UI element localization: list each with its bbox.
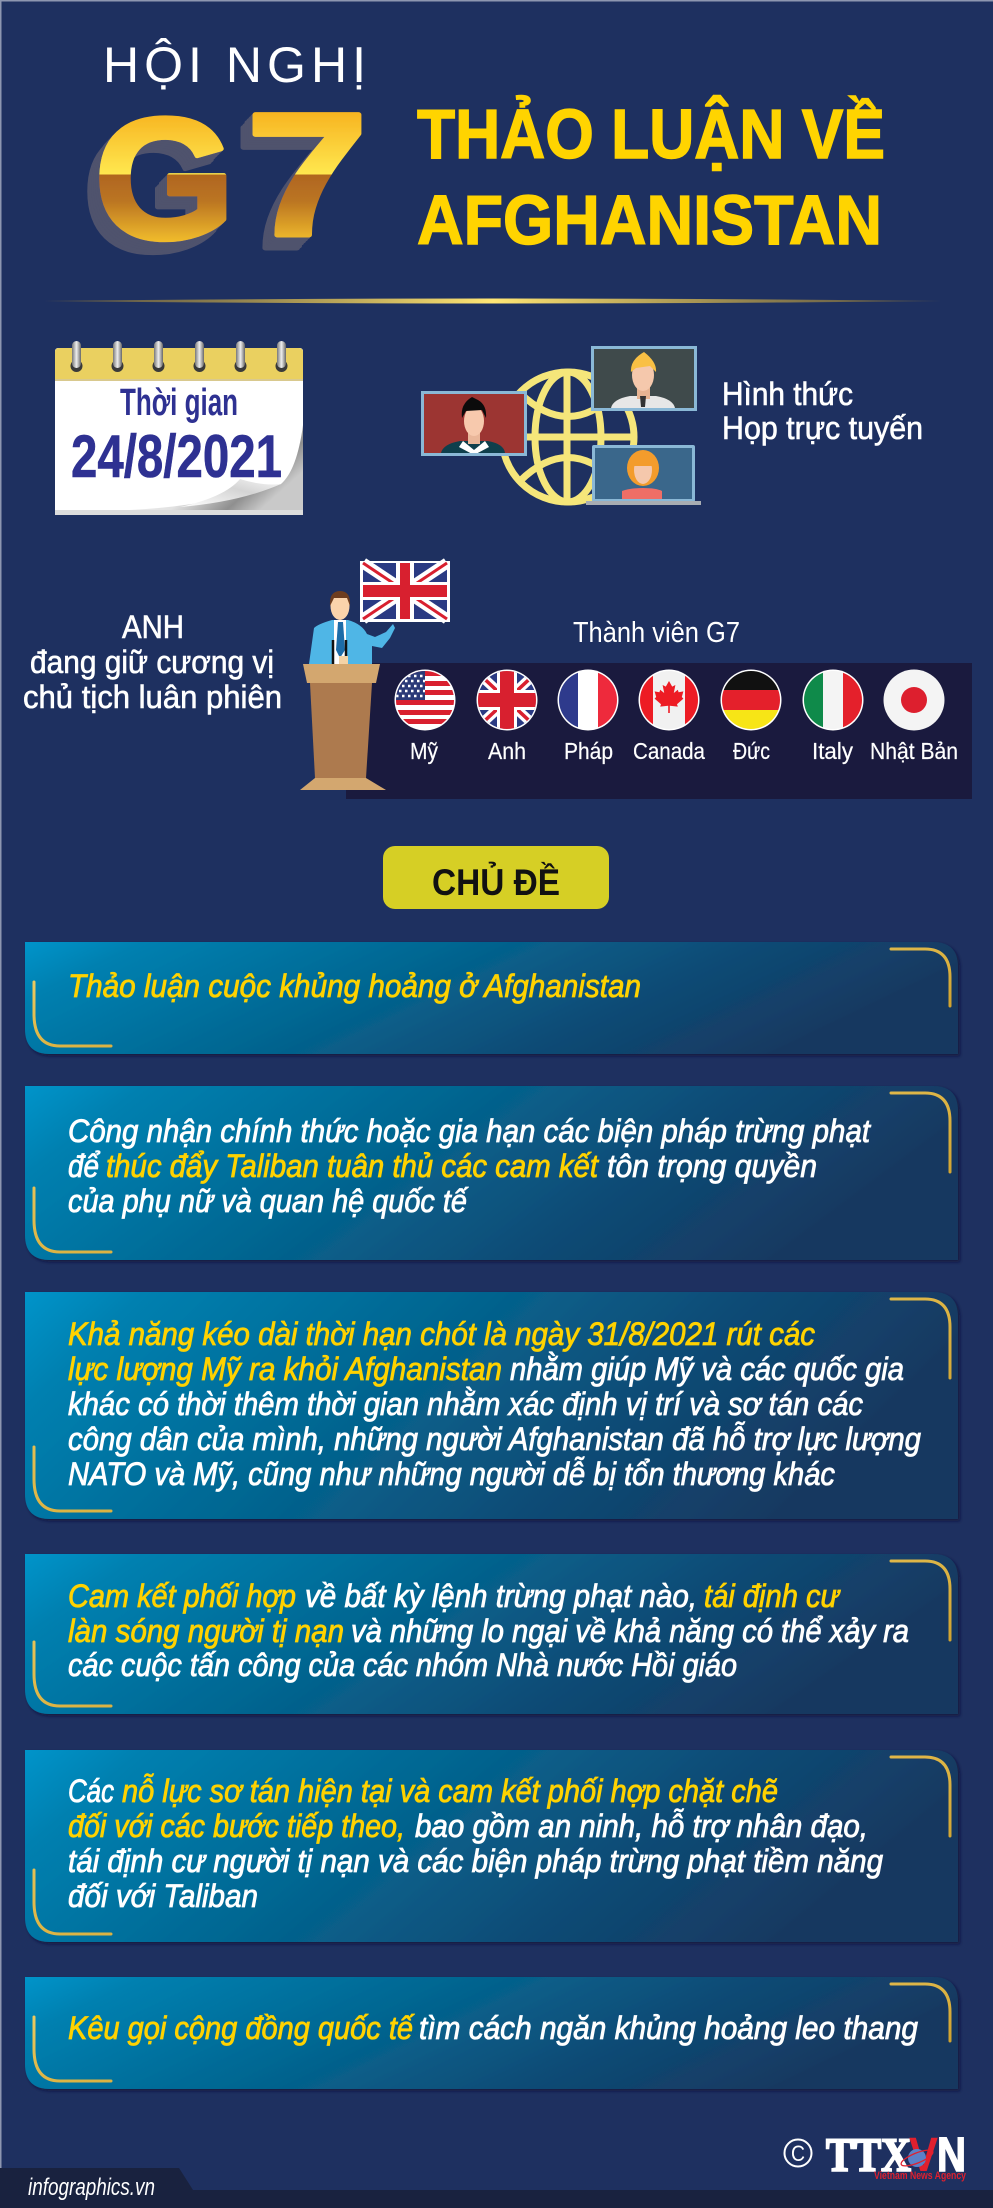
heading: Thảo luận về Afghanistan: THẢO LUẬN VỀ [417, 94, 885, 173]
flag: UK [476, 670, 538, 730]
text: Thảo luận cuộc khủng hoảng ở Afghanistan [68, 968, 641, 1004]
participant: blond man [591, 346, 697, 411]
text: để [68, 1148, 101, 1184]
text: nhằm giúp Mỹ và các quốc gia [510, 1351, 904, 1387]
footer: source: infographics.vn [28, 2174, 155, 2201]
text [68, 1773, 883, 1914]
flag: Germany [720, 670, 782, 730]
button: topic heading [383, 846, 609, 909]
panel: topic 2 [25, 1086, 958, 1260]
binder rings [70, 341, 288, 372]
flag: USA [394, 670, 456, 730]
text [68, 1316, 921, 1492]
text: bao gồm an ninh, hỗ trợ nhân đạo, [415, 1808, 868, 1844]
text: tìm cách ngăn khủng hoảng leo thang [419, 2010, 918, 2046]
panel: topic 4 [25, 1554, 958, 1714]
member labels [410, 738, 958, 764]
speaker figure [309, 591, 395, 665]
text: của phụ nữ và quan hệ quốc tế [68, 1183, 469, 1219]
flag: Italy [802, 670, 864, 730]
icon: speaker at podium with UK flag [300, 561, 450, 790]
text: UK rotating presidency: chủ tịch luân phiên [23, 679, 282, 715]
text: các cuộc tấn công của các nhóm Nhà nước Hồi giáo [68, 1647, 737, 1683]
logo: G7 gold lettering: 7 [246, 77, 368, 272]
panel: G7 members [346, 617, 972, 799]
agency globe [899, 2147, 935, 2169]
member labels: Đức [733, 738, 770, 764]
panel: topic 5 [25, 1750, 958, 1942]
title block [94, 37, 885, 275]
member labels: Mỹ [410, 738, 438, 764]
panel: topic 6 [25, 1977, 958, 2089]
text: NATO và Mỹ, cũng như những người dễ bị tổn thương khác [68, 1456, 835, 1492]
panel: topic 3 [25, 1292, 958, 1519]
logo: G7 gold lettering [94, 77, 368, 275]
footer: source [0, 2168, 993, 2208]
text [68, 2010, 918, 2046]
member labels: Canada [633, 738, 705, 764]
agency wordmark: TTX [826, 2129, 911, 2182]
text: format of meeting: Hình thức [722, 376, 853, 412]
member labels: Nhật Bản [870, 738, 958, 764]
heading: Thảo luận về Afghanistan: AFGHANISTAN [417, 181, 882, 259]
copyright mark: C [791, 2141, 805, 2166]
agency tagline: Vietnam News Agency [874, 2170, 967, 2182]
logo: TTXVN [784, 2129, 967, 2182]
text: tôn trọng quyền [607, 1148, 817, 1184]
text: format of meeting [722, 376, 923, 446]
participant: man on red screen [421, 391, 527, 456]
flag: Japan [884, 670, 944, 730]
text: công dân của mình, những người Afghanistan đã hỗ trợ lực lượng [68, 1421, 921, 1457]
text: về bất kỳ lệnh trừng phạt nào, [305, 1578, 697, 1614]
text: Các [68, 1773, 114, 1809]
text: Khả năng kéo dài thời hạn chót là ngày 31/8/2021 rút các [68, 1316, 815, 1352]
UK flag board [360, 561, 450, 622]
flag: Canada [638, 670, 700, 730]
agency wordmark: N [937, 2129, 966, 2182]
text [68, 1578, 909, 1683]
calendar: date [55, 341, 303, 515]
heading: Thảo luận về Afghanistan [417, 94, 885, 259]
flag: France [558, 670, 618, 730]
icon: globe with video participants [421, 346, 701, 505]
heading: G7 members: Thành viên G7 [573, 617, 740, 649]
member labels: Italy [812, 738, 853, 764]
text: đối với các bước tiếp theo, [68, 1808, 405, 1844]
page curl [130, 425, 303, 510]
button: topic heading: CHỦ ĐỀ [432, 861, 560, 903]
copyright mark [784, 2140, 812, 2166]
text: UK rotating presidency [23, 609, 282, 715]
text: Công nhận chính thức hoặc gia hạn các biện pháp trừng phạt [68, 1113, 871, 1149]
member labels: Anh [488, 738, 526, 764]
text: tái định cư người tị nạn và các biện pháp trừng phạt tiềm năng [68, 1843, 883, 1879]
text: nỗ lực sơ tán hiện tại và cam kết phối hợp chặt chẽ [122, 1773, 778, 1809]
logo: G7 gold lettering: G [95, 83, 235, 275]
text: thúc đẩy Taliban tuân thủ các cam kết [106, 1148, 599, 1184]
text: và những lo ngại về khả năng có thể xảy ra [351, 1613, 909, 1649]
text: UK rotating presidency: ANH [122, 609, 184, 645]
text: làn sóng người tị nạn [68, 1613, 344, 1649]
text: UK rotating presidency: đang giữ cương vị [30, 644, 274, 680]
podium [300, 664, 386, 790]
calendar date: 24/8/2021 [71, 423, 282, 490]
text [68, 1113, 871, 1219]
text: Cam kết phối hợp [68, 1578, 296, 1614]
agency wordmark: V [909, 2129, 938, 2182]
member labels: Pháp [564, 738, 613, 764]
text: format of meeting: Họp trực tuyến [722, 410, 923, 446]
heading: Hội nghị: HỘI NGHỊ [103, 37, 366, 93]
calendar label: Thời gian [120, 382, 238, 424]
participant: woman on laptop [586, 445, 701, 505]
globe [502, 372, 634, 502]
text: Kêu gọi cộng đồng quốc tế [68, 2010, 415, 2046]
panel: topic 1 [25, 942, 958, 1054]
text: tái định cư [704, 1578, 841, 1614]
text: khác có thời thêm thời gian nhằm xác định vị trí và sơ tán các [68, 1386, 863, 1422]
text: đối với Taliban [68, 1878, 258, 1914]
text: lực lượng Mỹ ra khỏi Afghanistan [68, 1351, 502, 1387]
